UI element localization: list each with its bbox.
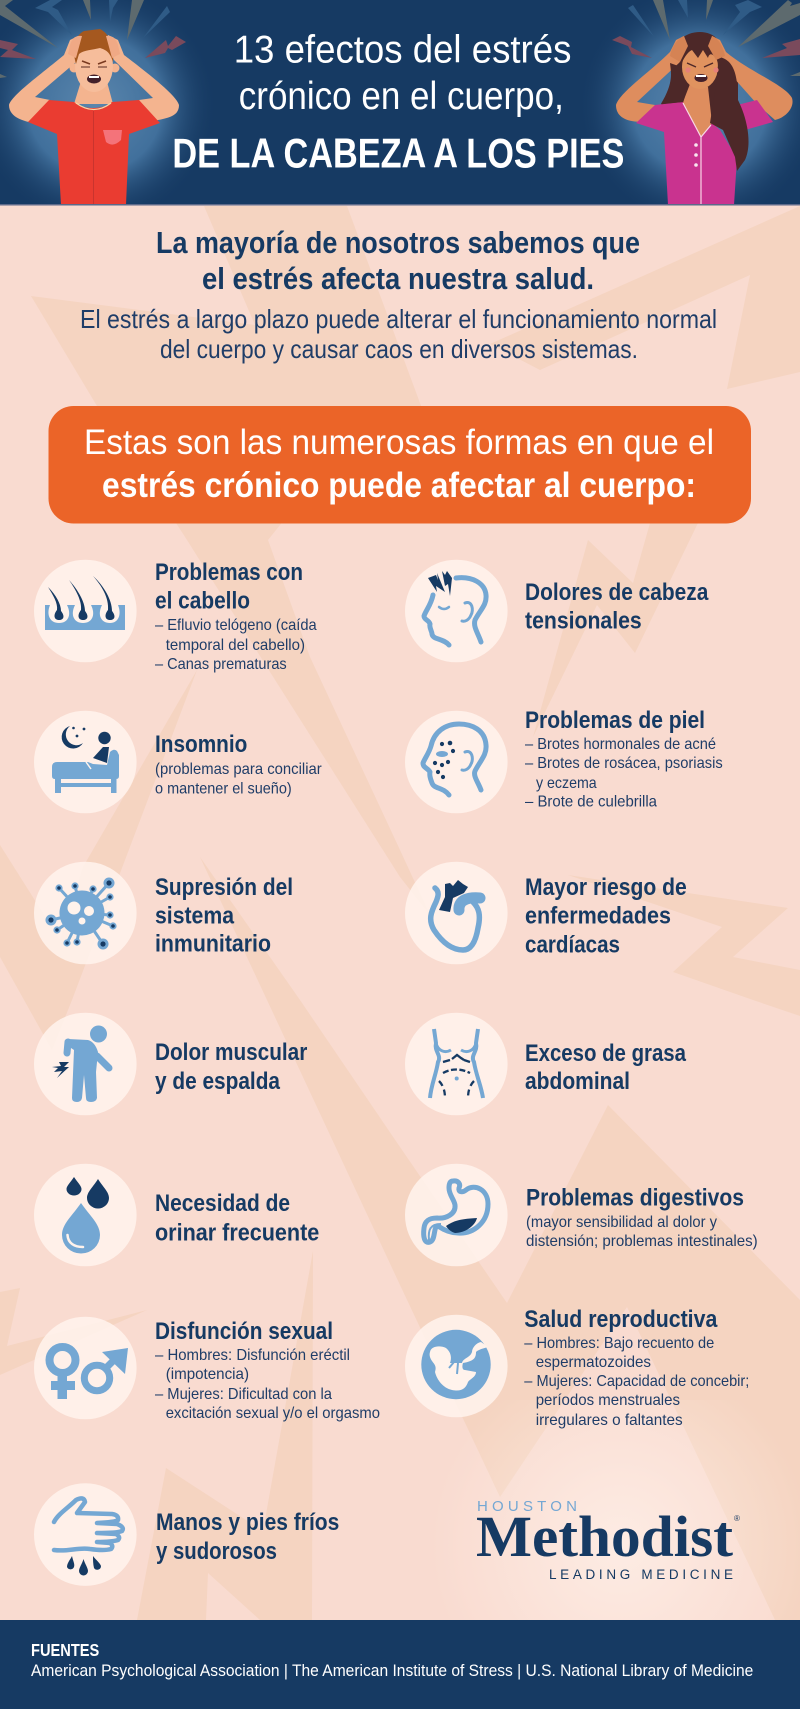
- heading: dolores de cabeza tensionales: Dolores de cabeza: [525, 579, 709, 606]
- icon: stomach: [405, 1164, 508, 1266]
- heading: supresión del sistema inmunitario: inmunitario: [155, 931, 271, 958]
- heading: necesidad de orinar frecuente: Necesidad de: [155, 1190, 290, 1217]
- panel: piel: [405, 707, 723, 813]
- intro text: El estrés a largo plazo puede alterar el funcionamiento normal: [80, 304, 717, 334]
- heading: mayor riesgo de enfermedades cardíacas: Mayor riesgo de: [525, 874, 687, 901]
- heading: exceso de grasa abdominal: abdominal: [525, 1068, 630, 1095]
- heading: manos y pies fríos y sudorosos: y sudorosos: [156, 1538, 277, 1565]
- text: insomnio: o mantener el sueño): [155, 780, 292, 797]
- text: problemas de piel: [525, 736, 723, 811]
- stress bolts left: [0, 0, 186, 78]
- heading: manos y pies fríos y sudorosos: [156, 1509, 339, 1565]
- heading: supresión del sistema inmunitario: Supresión del: [155, 874, 293, 901]
- logo: Houston Methodist: Methodist: [476, 1504, 734, 1569]
- intro heading: La mayoría de nosotros sabemos que: [156, 225, 640, 260]
- heading: necesidad de orinar frecuente: orinar frecuente: [155, 1220, 319, 1247]
- text: insomnio: [155, 761, 322, 797]
- text: problemas de piel: y eczema: [536, 775, 597, 792]
- heading: insomnio: Insomnio: [155, 731, 247, 758]
- intro text: [80, 304, 717, 364]
- icon: hair follicles: [34, 560, 137, 662]
- text: salud reproductiva: [524, 1335, 749, 1429]
- icon: virus: [34, 862, 137, 964]
- panel: cardíacas: [405, 862, 687, 964]
- heading: exceso de grasa abdominal: Exceso de grasa: [525, 1040, 687, 1067]
- panel: grasa abdominal: [405, 1013, 687, 1115]
- intro heading: el estrés afecta nuestra salud.: [202, 261, 594, 296]
- heading: mayor riesgo de enfermedades cardíacas: enfermedades: [525, 902, 671, 929]
- orange callout: [48, 406, 751, 524]
- text: salud reproductiva: – Mujeres: Capacidad de concebir;: [524, 1373, 749, 1390]
- text: disfunción sexual: – Mujeres: Dificultad con la: [155, 1386, 332, 1403]
- text: salud reproductiva: períodos menstruales: [536, 1392, 680, 1409]
- icon: fetus: [405, 1315, 508, 1417]
- heading: mayor riesgo de enfermedades cardíacas: [525, 874, 687, 958]
- title: crónico en el cuerpo,: [239, 75, 564, 118]
- text: disfunción sexual: (impotencia): [166, 1366, 249, 1383]
- heading: dolores de cabeza tensionales: [525, 579, 709, 634]
- icon: head with skin spots: [405, 711, 508, 813]
- icon: head with lightning: [405, 560, 508, 662]
- heading: problemas digestivos: Problemas digestivos: [526, 1185, 744, 1212]
- heading: problemas con el cabello: Problemas con: [155, 559, 303, 586]
- icon: heart: [405, 862, 508, 964]
- heading: problemas con el cabello: el cabello: [155, 587, 250, 614]
- text: efectos cabello: – Canas prematuras: [155, 656, 287, 673]
- icon: water drops: [34, 1164, 137, 1266]
- text: disfunción sexual: excitación sexual y/o el orgasmo: [166, 1405, 380, 1422]
- panel: manos y pies: [34, 1483, 339, 1586]
- title: DE LA CABEZA A LOS PIES: [172, 130, 624, 177]
- icon: abdomen: [405, 1013, 508, 1115]
- text: salud reproductiva: – Hombres: Bajo recuento de: [524, 1335, 714, 1352]
- text: efectos cabello: temporal del cabello): [166, 637, 305, 654]
- text: disfunción sexual: – Hombres: Disfunción eréctil: [155, 1347, 350, 1364]
- text: problemas digestivos: distensión; problemas intestinales): [526, 1233, 758, 1250]
- panel: insomnio: [34, 711, 322, 813]
- text: problemas de piel: – Brote de culebrilla: [525, 794, 657, 811]
- text: problemas digestivos: [526, 1214, 758, 1250]
- text: efectos cabello: – Efluvio telógeno (caída: [155, 617, 317, 634]
- icon: gender symbols: [34, 1317, 137, 1419]
- heading: disfunción sexual: Disfunción sexual: [155, 1318, 333, 1345]
- footer: sources: FUENTES: [31, 1640, 99, 1660]
- panel: cabello: [34, 559, 317, 673]
- heading: supresión del sistema inmunitario: sistema: [155, 902, 235, 929]
- text: insomnio: (problemas para conciliar: [155, 761, 322, 778]
- heading: dolores de cabeza tensionales: tensionales: [525, 607, 642, 634]
- heading: necesidad de orinar frecuente: [155, 1190, 319, 1247]
- logo: Houston Methodist: HOUSTON: [477, 1498, 577, 1515]
- man holding his head: [9, 29, 179, 205]
- text: salud reproductiva: irregulares o faltantes: [536, 1412, 683, 1429]
- orange callout: estrés crónico puede afectar al cuerpo:: [102, 466, 696, 505]
- panel: salud reproductiva: [405, 1306, 749, 1429]
- intro heading: [156, 225, 640, 296]
- icon: person with back pain: [34, 1013, 137, 1115]
- panel: digestivos: [405, 1164, 758, 1266]
- title: [172, 29, 624, 177]
- text: problemas de piel: – Brotes hormonales de acné: [525, 736, 716, 753]
- heading: dolor muscular y de espalda: [155, 1039, 307, 1095]
- icon: sweaty hand: [34, 1483, 137, 1586]
- text: problemas digestivos: (mayor sensibilidad al dolor y: [526, 1214, 717, 1231]
- header banner: [0, 0, 800, 206]
- orange callout: Estas son las numerosas formas en que el: [84, 423, 714, 462]
- text: disfunción sexual: [155, 1347, 380, 1422]
- panel: disfunción sexual: [34, 1317, 380, 1422]
- heading: dolor muscular y de espalda: Dolor muscular: [155, 1039, 307, 1066]
- panel: dolor muscular: [34, 1013, 307, 1115]
- heading: exceso de grasa abdominal: [525, 1040, 687, 1095]
- text: problemas de piel: – Brotes de rosácea, psoriasis: [525, 755, 723, 772]
- heading: problemas con el cabello: [155, 559, 303, 614]
- heading: salud reproductiva: Salud reproductiva: [524, 1306, 718, 1333]
- title: 13 efectos del estrés: [234, 29, 571, 72]
- text: salud reproductiva: espermatozoides: [536, 1354, 651, 1371]
- panel: dolores de cabeza: [405, 560, 709, 662]
- intro text: del cuerpo y causar caos en diversos sistemas.: [160, 334, 638, 364]
- logo: Houston Methodist: LEADING MEDICINE: [549, 1567, 733, 1582]
- panel: orinar frecuente: [34, 1164, 319, 1266]
- heading: supresión del sistema inmunitario: [155, 874, 293, 958]
- panel: sistema inmunitario: [34, 862, 293, 964]
- stress bolts right: [612, 0, 800, 76]
- heading: mayor riesgo de enfermedades cardíacas: cardíacas: [525, 931, 620, 958]
- woman holding her head: [616, 32, 793, 205]
- heading: manos y pies fríos y sudorosos: Manos y pies fríos: [156, 1509, 339, 1536]
- heading: problemas de piel: Problemas de piel: [525, 707, 705, 734]
- footer: sources: American Psychological Association | The American Institute of Stress | U.S. National Library of Medicine: [31, 1661, 753, 1680]
- icon: bed and moon: [34, 711, 137, 813]
- heading: dolor muscular y de espalda: y de espalda: [155, 1068, 281, 1095]
- text: efectos cabello: [155, 617, 317, 673]
- logo: Houston Methodist: ®: [734, 1514, 740, 1523]
- footer: sources: [0, 1620, 800, 1709]
